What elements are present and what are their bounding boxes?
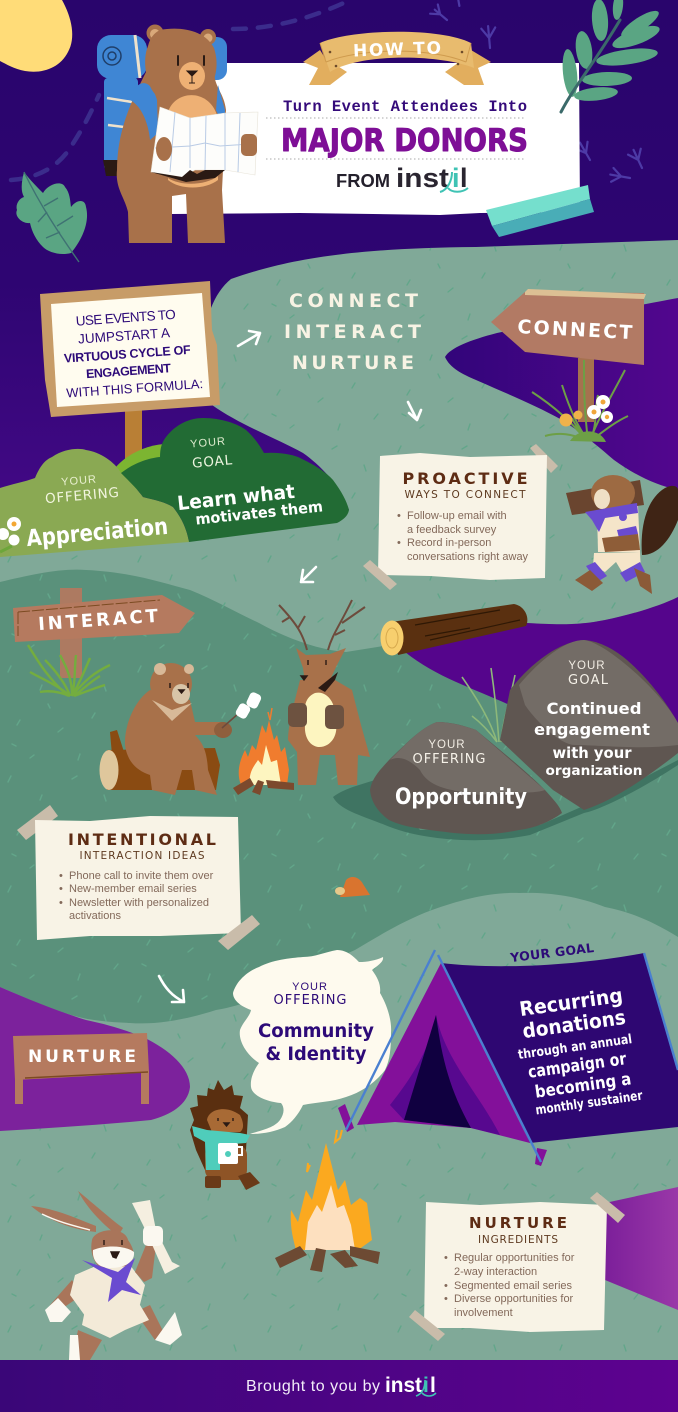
eyes bbox=[178, 56, 204, 65]
nurture sign bbox=[13, 1033, 149, 1104]
intro sign bbox=[40, 281, 220, 476]
from instil logo: inst bbox=[396, 163, 449, 193]
rock: goal: YOUR bbox=[568, 660, 606, 672]
connect sign bbox=[491, 289, 646, 422]
note: nurture ingredients: Diverse opportunities for bbox=[454, 1293, 574, 1305]
socks and feet bbox=[69, 1312, 182, 1360]
note: proactive: a feedback survey bbox=[407, 524, 497, 536]
bush: goal: motivates them bbox=[195, 497, 324, 529]
shirt bbox=[70, 1262, 145, 1320]
rock: goal: engagement bbox=[534, 720, 650, 739]
left arm bbox=[50, 1280, 82, 1310]
boots bbox=[575, 568, 652, 594]
log bbox=[100, 730, 220, 790]
note: proactive: Follow-up email with bbox=[407, 510, 507, 522]
goal text: Recurring bbox=[518, 983, 624, 1021]
right hand bbox=[143, 1226, 163, 1246]
hands bbox=[288, 703, 307, 727]
footer: Brought to you by bbox=[246, 1378, 380, 1395]
sign text: USE EVENTS TO bbox=[75, 307, 176, 329]
note: proactive bbox=[363, 444, 558, 590]
legs bbox=[15, 1070, 149, 1104]
note: nurture ingredients bbox=[409, 1192, 625, 1341]
tape bbox=[17, 805, 58, 840]
arrow: to proactive bbox=[408, 402, 421, 420]
note: nurture ingredients: INGREDIENTS bbox=[478, 1234, 558, 1246]
formula words: CONNECT bbox=[289, 290, 418, 312]
formula words bbox=[284, 290, 421, 374]
shorts bbox=[82, 1305, 149, 1338]
shirt bbox=[597, 506, 640, 552]
note: proactive: conversations right away bbox=[407, 551, 529, 563]
board bbox=[13, 1033, 149, 1080]
sign text: ENGAGEMENT bbox=[86, 361, 172, 381]
animal footprints bbox=[430, 0, 648, 185]
rock: goal: Continued bbox=[546, 699, 642, 718]
face bbox=[207, 1109, 243, 1132]
bush: goal: GOAL bbox=[191, 452, 233, 472]
head bbox=[150, 663, 192, 705]
note: intentional: activations bbox=[69, 910, 121, 922]
sun bbox=[0, 0, 72, 72]
ears bbox=[31, 1206, 96, 1232]
right arm bbox=[135, 1240, 156, 1282]
goal label: YOUR GOAL bbox=[508, 940, 595, 965]
shorts bbox=[593, 552, 641, 572]
left hand bbox=[45, 1298, 71, 1322]
bear body bbox=[117, 70, 226, 243]
front bbox=[357, 963, 530, 1143]
rock: offering: YOUR bbox=[428, 739, 466, 751]
bush: lime back bbox=[110, 444, 180, 490]
subtitle: Turn Event Attendees Into bbox=[283, 98, 527, 116]
wooden banner: how to bbox=[303, 32, 491, 85]
from instil logo: l bbox=[460, 163, 468, 193]
mug bbox=[218, 1143, 238, 1164]
connect sign: CONNECT bbox=[517, 316, 633, 344]
tail bbox=[642, 486, 678, 555]
scarf bbox=[82, 1258, 141, 1302]
note: intentional: New-member email series bbox=[69, 883, 197, 895]
note: nurture ingredients: • bbox=[444, 1293, 448, 1305]
from instil logo bbox=[336, 163, 468, 193]
note: nurture ingredients: • bbox=[444, 1280, 448, 1292]
arrow: to formula bbox=[238, 331, 260, 346]
goal text: donations bbox=[521, 1005, 627, 1043]
note: proactive: Record in-person bbox=[407, 537, 491, 549]
purple region middle right bbox=[405, 597, 678, 735]
title card bbox=[171, 63, 580, 215]
bush: goal: Learn what bbox=[176, 480, 296, 515]
note: nurture ingredients: NURTURE bbox=[469, 1214, 567, 1232]
speech cloud: Community bbox=[258, 1020, 375, 1042]
note: nurture ingredients: 2-way interaction bbox=[454, 1266, 537, 1278]
interact sign bbox=[13, 588, 195, 678]
bear with backpack and map bbox=[97, 24, 258, 243]
fly side bbox=[441, 953, 678, 1143]
tape bbox=[363, 560, 397, 590]
bush: goal bbox=[121, 418, 349, 542]
goal text: becoming a bbox=[534, 1069, 633, 1103]
plank bbox=[320, 32, 474, 72]
note: proactive: • bbox=[397, 510, 401, 522]
head bbox=[591, 475, 635, 511]
body bbox=[288, 680, 370, 785]
instil logo footer: inst bbox=[385, 1374, 422, 1397]
arrow: to nurture bbox=[159, 976, 184, 1002]
ears bbox=[146, 24, 164, 42]
scarf bbox=[585, 503, 638, 532]
body bbox=[125, 690, 224, 795]
deer bbox=[279, 600, 370, 785]
logs bbox=[566, 480, 644, 515]
speech cloud: & Identity bbox=[266, 1043, 367, 1065]
from instil logo: i bbox=[452, 163, 460, 193]
rock: goal: organization bbox=[546, 764, 642, 779]
hand bbox=[214, 722, 232, 738]
interact sign: INTERACT bbox=[37, 606, 159, 635]
post bbox=[60, 588, 82, 678]
legs bbox=[72, 1305, 165, 1360]
flowers and grass at connect sign bbox=[532, 360, 628, 442]
rock: goal: with your bbox=[552, 744, 632, 762]
note: proactive: PROACTIVE bbox=[402, 469, 528, 488]
formula words: NURTURE bbox=[292, 352, 414, 374]
rock: offering: OFFERING bbox=[412, 752, 486, 767]
rock shadow bbox=[333, 760, 678, 840]
dark green meadow bbox=[0, 570, 678, 1023]
note: nurture ingredients: involvement bbox=[454, 1307, 513, 1319]
post bbox=[578, 358, 594, 422]
formula words: INTERACT bbox=[284, 321, 421, 343]
note: proactive: WAYS TO CONNECT bbox=[404, 489, 526, 501]
bear sitting on log bbox=[100, 663, 262, 795]
from instil logo: FROM bbox=[336, 170, 390, 191]
campfire large bbox=[275, 1130, 380, 1272]
beaver carrying logs bbox=[566, 475, 678, 594]
arm bbox=[602, 534, 640, 552]
sign text bbox=[61, 305, 204, 401]
note: nurture ingredients: Segmented email series bbox=[454, 1280, 573, 1292]
socks bbox=[586, 562, 645, 582]
wood frame bbox=[40, 281, 220, 417]
goal text: through an annual bbox=[517, 1032, 633, 1063]
dotted divider top bbox=[266, 117, 526, 119]
grass near rocks bbox=[462, 668, 515, 742]
dashed trail bbox=[11, 0, 350, 180]
door bbox=[404, 1015, 471, 1128]
poles bbox=[346, 950, 678, 1162]
rock: goal bbox=[500, 640, 678, 810]
daisies bbox=[0, 517, 21, 552]
bush: offering: Appreciation bbox=[25, 514, 169, 552]
leaf: top right branch bbox=[561, 0, 662, 112]
strap bbox=[130, 83, 158, 140]
winding path bbox=[0, 240, 678, 1360]
wooden banner: how to: HOW TO bbox=[353, 38, 441, 62]
muzzle bbox=[179, 62, 205, 90]
body bbox=[205, 1145, 247, 1180]
note: intentional: INTERACTION IDEAS bbox=[80, 850, 205, 862]
sign text: WITH THIS FORMULA: bbox=[66, 376, 204, 401]
scarf bbox=[192, 1126, 250, 1170]
note: nurture ingredients: • bbox=[444, 1252, 448, 1264]
tape bbox=[530, 444, 558, 473]
belly bbox=[168, 95, 217, 130]
antlers bbox=[279, 600, 365, 650]
tiny tent and snail bbox=[335, 877, 370, 897]
tape bbox=[409, 1310, 445, 1341]
head bbox=[145, 29, 217, 94]
note: nurture ingredients: Regular opportunities for bbox=[454, 1252, 575, 1264]
instil logo footer: i bbox=[423, 1374, 429, 1397]
rock: offering: Opportunity bbox=[395, 785, 527, 810]
bush: offering: YOUR bbox=[61, 473, 97, 489]
note: intentional: • bbox=[59, 870, 63, 882]
goal text: campaign or bbox=[527, 1049, 628, 1083]
tape bbox=[590, 1192, 625, 1223]
stakes bbox=[338, 1104, 547, 1166]
note: intentional: INTENTIONAL bbox=[68, 830, 216, 849]
bush: goal: YOUR bbox=[190, 435, 226, 451]
tent bbox=[338, 940, 678, 1166]
feet bbox=[205, 1176, 221, 1188]
grass at interact sign bbox=[28, 645, 110, 696]
purple region upper right bbox=[445, 298, 678, 490]
teal tape bbox=[486, 185, 594, 237]
board bbox=[13, 595, 195, 642]
bush: offering bbox=[0, 449, 189, 557]
dotted divider bottom bbox=[266, 158, 526, 160]
head bbox=[91, 1230, 134, 1268]
goal text bbox=[517, 983, 644, 1118]
rabbit with scroll bbox=[31, 1191, 182, 1360]
goal text: monthly sustainer bbox=[535, 1088, 644, 1118]
hedgehog with mug bbox=[190, 1080, 260, 1190]
speech cloud bbox=[233, 950, 391, 1134]
cream panel bbox=[51, 293, 210, 407]
stick and marshmallows bbox=[222, 691, 262, 728]
rock: goal: GOAL bbox=[568, 673, 609, 688]
scroll bbox=[132, 1200, 180, 1274]
rock: offering bbox=[370, 722, 562, 834]
spikes bbox=[190, 1080, 248, 1170]
bush: offering: OFFERING bbox=[44, 485, 120, 507]
sign text: VIRTUOUS CYCLE OF bbox=[63, 343, 191, 366]
belly bbox=[305, 693, 336, 747]
heading: major donors: MAJOR DONORS bbox=[281, 123, 528, 159]
note: intentional: • bbox=[59, 883, 63, 895]
backpack bbox=[97, 35, 227, 176]
leaf: lower left bbox=[16, 172, 87, 262]
sign text: JUMPSTART A bbox=[78, 325, 170, 347]
board bbox=[491, 292, 644, 365]
post bbox=[125, 410, 142, 476]
purple region nurture bbox=[0, 987, 190, 1131]
nurture sign: NURTURE bbox=[28, 1047, 136, 1067]
note: intentional bbox=[17, 805, 260, 950]
speech cloud: YOUR bbox=[292, 981, 328, 993]
purple region bottom right bbox=[605, 1187, 678, 1310]
campfire small bbox=[233, 708, 294, 795]
instil logo footer: l bbox=[430, 1374, 436, 1397]
note: intentional: Newsletter with personalized bbox=[69, 897, 209, 909]
head bbox=[296, 648, 346, 688]
note: intentional: • bbox=[59, 897, 63, 909]
ribbon wings bbox=[303, 50, 491, 85]
tape bbox=[218, 915, 260, 950]
note: intentional: Phone call to invite them over bbox=[69, 870, 214, 882]
speech cloud: OFFERING bbox=[274, 993, 346, 1008]
map bbox=[151, 107, 258, 177]
arrow: to interact bbox=[301, 567, 316, 582]
footer bbox=[0, 1360, 678, 1412]
note: proactive: • bbox=[397, 537, 401, 549]
hands bbox=[156, 137, 172, 161]
big log bbox=[380, 604, 527, 656]
